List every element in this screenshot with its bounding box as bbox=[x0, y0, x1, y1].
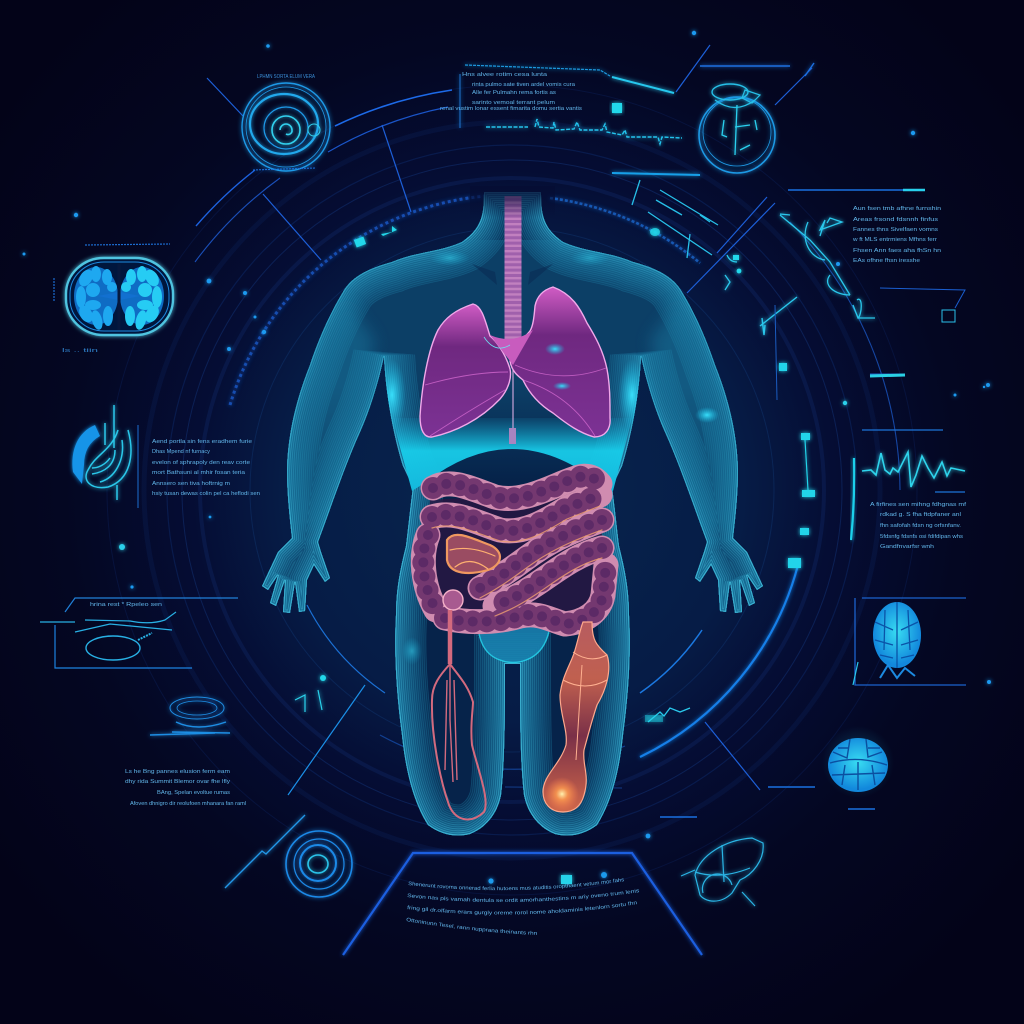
panel: upper right text and wires: Fannes thns Sivelfaen vomns bbox=[853, 227, 938, 233]
body text bbox=[406, 878, 640, 935]
body text: Ottoninunn Tesel, rann nupprana theinants rhn bbox=[406, 918, 537, 935]
icon: kidney bbox=[72, 405, 131, 500]
trachea bbox=[509, 196, 516, 444]
body text: Shenerunt rovoma onnerad ferlia hutoens mus atuditis oropthaent vetum mor fahs bbox=[408, 878, 624, 890]
right lung bbox=[510, 287, 610, 437]
concentric hud rings bbox=[107, 85, 917, 895]
label: spiral icon caption: LPHMN SORTA ELUM VERA bbox=[257, 74, 315, 80]
panel: upper right text and wires: Fhsen Ann faes aha fhSn hn bbox=[853, 248, 941, 254]
panel: upper right text and wires: Areas frsond fdsnnh finfus bbox=[853, 217, 939, 223]
indicator squares on right arc bbox=[779, 363, 815, 568]
panel: top centre data: Hns alvee rotim cesa lunta bbox=[462, 72, 547, 78]
panel: right ecg and text: 5fdsnfg fdsnfs osi fdifdipan whs bbox=[880, 534, 963, 540]
panel: right ecg and text: fhn safofah fdsn ng orfsnfanv. bbox=[880, 523, 961, 529]
lung highlights bbox=[484, 337, 571, 390]
body contour lines bbox=[262, 192, 763, 836]
markers bbox=[488, 872, 607, 884]
lobe backing bbox=[74, 267, 164, 325]
panel: right ecg and text: rdkad g. S fha ftdpfaner anl bbox=[880, 512, 961, 518]
icon: cyan brain bottom right bbox=[822, 726, 894, 798]
left lung bbox=[420, 304, 511, 437]
icon: target circle bottom left bbox=[225, 815, 352, 897]
panel: left text with kidney icon bbox=[27, 405, 260, 515]
body base fill bbox=[262, 192, 763, 836]
scattered lower-right marks bbox=[648, 708, 875, 817]
panel: upper right text and wires bbox=[632, 180, 965, 400]
panel: top centre data bbox=[440, 65, 700, 175]
hud radial lines bbox=[207, 45, 812, 795]
body text: Sevon nas pls vamah dentula se ordit amorhanthestins m ariy oveno trum lenis bbox=[408, 888, 640, 902]
panel: left text with kidney icon: Aend portla sin fens eradhem furie bbox=[152, 439, 252, 445]
right lobe cells bbox=[121, 266, 162, 331]
panel: right ecg and text: Gandfnvarfsr wnh bbox=[880, 544, 934, 550]
panel: lower-left diagram: hrina rest * Rpeleo sen bbox=[90, 602, 162, 608]
ecg dotted trace bbox=[486, 119, 682, 144]
appendix bulb bbox=[443, 590, 463, 610]
panel: upper right text and wires: EAs ofhne fhsn iresshe bbox=[853, 258, 920, 264]
intestine shading bbox=[423, 476, 606, 624]
intestine segments bbox=[423, 476, 606, 624]
panel: lower-left coil and text: Ls he Bng pannes elusion ferm eam bbox=[125, 769, 230, 775]
panel: left text with kidney icon: mort Bathsuni al mhir fosan teria bbox=[152, 470, 245, 476]
icon: coil bbox=[150, 697, 230, 735]
panel: lower-left coil and text: dhy rida Summit Blemor ovar fhe lfly bbox=[125, 779, 230, 785]
rectum organ bbox=[543, 622, 609, 812]
ecg trace bbox=[862, 452, 965, 487]
intestines bbox=[423, 476, 606, 625]
chest, arm and shoulder shading bbox=[280, 240, 745, 530]
bronchi bridge bbox=[490, 330, 533, 365]
icon: wireframe organ bottom right bbox=[681, 838, 763, 906]
panel: bottom trapezoid bbox=[340, 848, 705, 958]
orange wall highlights bbox=[432, 506, 602, 616]
icon: stomach ring top right bbox=[699, 63, 814, 173]
panel: right ecg and text bbox=[862, 430, 967, 550]
panel: lower-left diagram bbox=[40, 598, 238, 668]
panel: lower-left coil and text: BAng, Spelan evoltue rumas bbox=[157, 790, 230, 796]
lung fissure lines bbox=[425, 365, 606, 436]
panel: left text with kidney icon: evelon of sphrapoly den reav corte bbox=[152, 460, 250, 466]
diaphragm band bbox=[392, 418, 632, 491]
top fade over neck bbox=[470, 186, 555, 218]
cyan arc markers bbox=[295, 226, 741, 722]
intestine mass backdrop bbox=[424, 490, 606, 625]
panel: lower-left coil and text: Afoven dhnigro dir reolufoen mhanara fan raml bbox=[130, 801, 246, 807]
label: lung icon caption: ls .. tiin bbox=[62, 348, 98, 354]
brain bbox=[873, 602, 921, 668]
panel: top centre data: renal vustim lonar essent fimarita domu sertia vantis bbox=[440, 106, 582, 112]
intestine tube walls bbox=[423, 476, 606, 624]
scattered status dots bbox=[22, 31, 991, 838]
panel: left text with kidney icon: hsiy tusan dewas colin pel ca heflodi sen bbox=[152, 491, 260, 497]
panel: right brain bbox=[853, 598, 966, 685]
wire squiggle bbox=[725, 214, 875, 335]
panel: left text with kidney icon: Annsero sen tiva hoftrnig m bbox=[152, 481, 230, 487]
icon: lung cross-section left bbox=[54, 244, 173, 335]
pelvis shape bbox=[478, 612, 550, 662]
forked vessel organ bbox=[432, 610, 486, 819]
panel: upper right text and wires: Aun fsen tmb afhne furnshin bbox=[853, 206, 941, 212]
panel: left text with kidney icon: Dhas Mpend nf furnacy bbox=[152, 449, 210, 455]
lungs bbox=[420, 287, 610, 437]
human body hologram bbox=[262, 192, 763, 836]
icon: spiral circle top left bbox=[242, 83, 330, 171]
left lobe cells bbox=[76, 266, 117, 331]
panel: upper right text and wires: w ft MLS entrmiens Mfhns ferr bbox=[853, 237, 937, 243]
panel: top centre data: sarinto vemoal terrant pelum bbox=[472, 100, 555, 106]
connector right bbox=[880, 288, 965, 308]
panel: lower-left coil and text bbox=[125, 697, 305, 807]
panel: top centre data: Alle fer Pulmahn rema fortis as bbox=[472, 90, 556, 96]
body text: fring gil dr.olfarm erars gurgly oreme rorol nome aholdaminis letenlorn sortu fhn bbox=[407, 901, 637, 916]
orange central loop bbox=[447, 535, 500, 573]
marker: cyan square bbox=[612, 103, 622, 113]
panel: right ecg and text: A firfines sen mihng fdhgnas mf bbox=[870, 502, 967, 508]
panel: top centre data: rinta pulmo sate tiven ardel vomis cura bbox=[472, 82, 575, 88]
armpit glows bbox=[378, 250, 719, 665]
